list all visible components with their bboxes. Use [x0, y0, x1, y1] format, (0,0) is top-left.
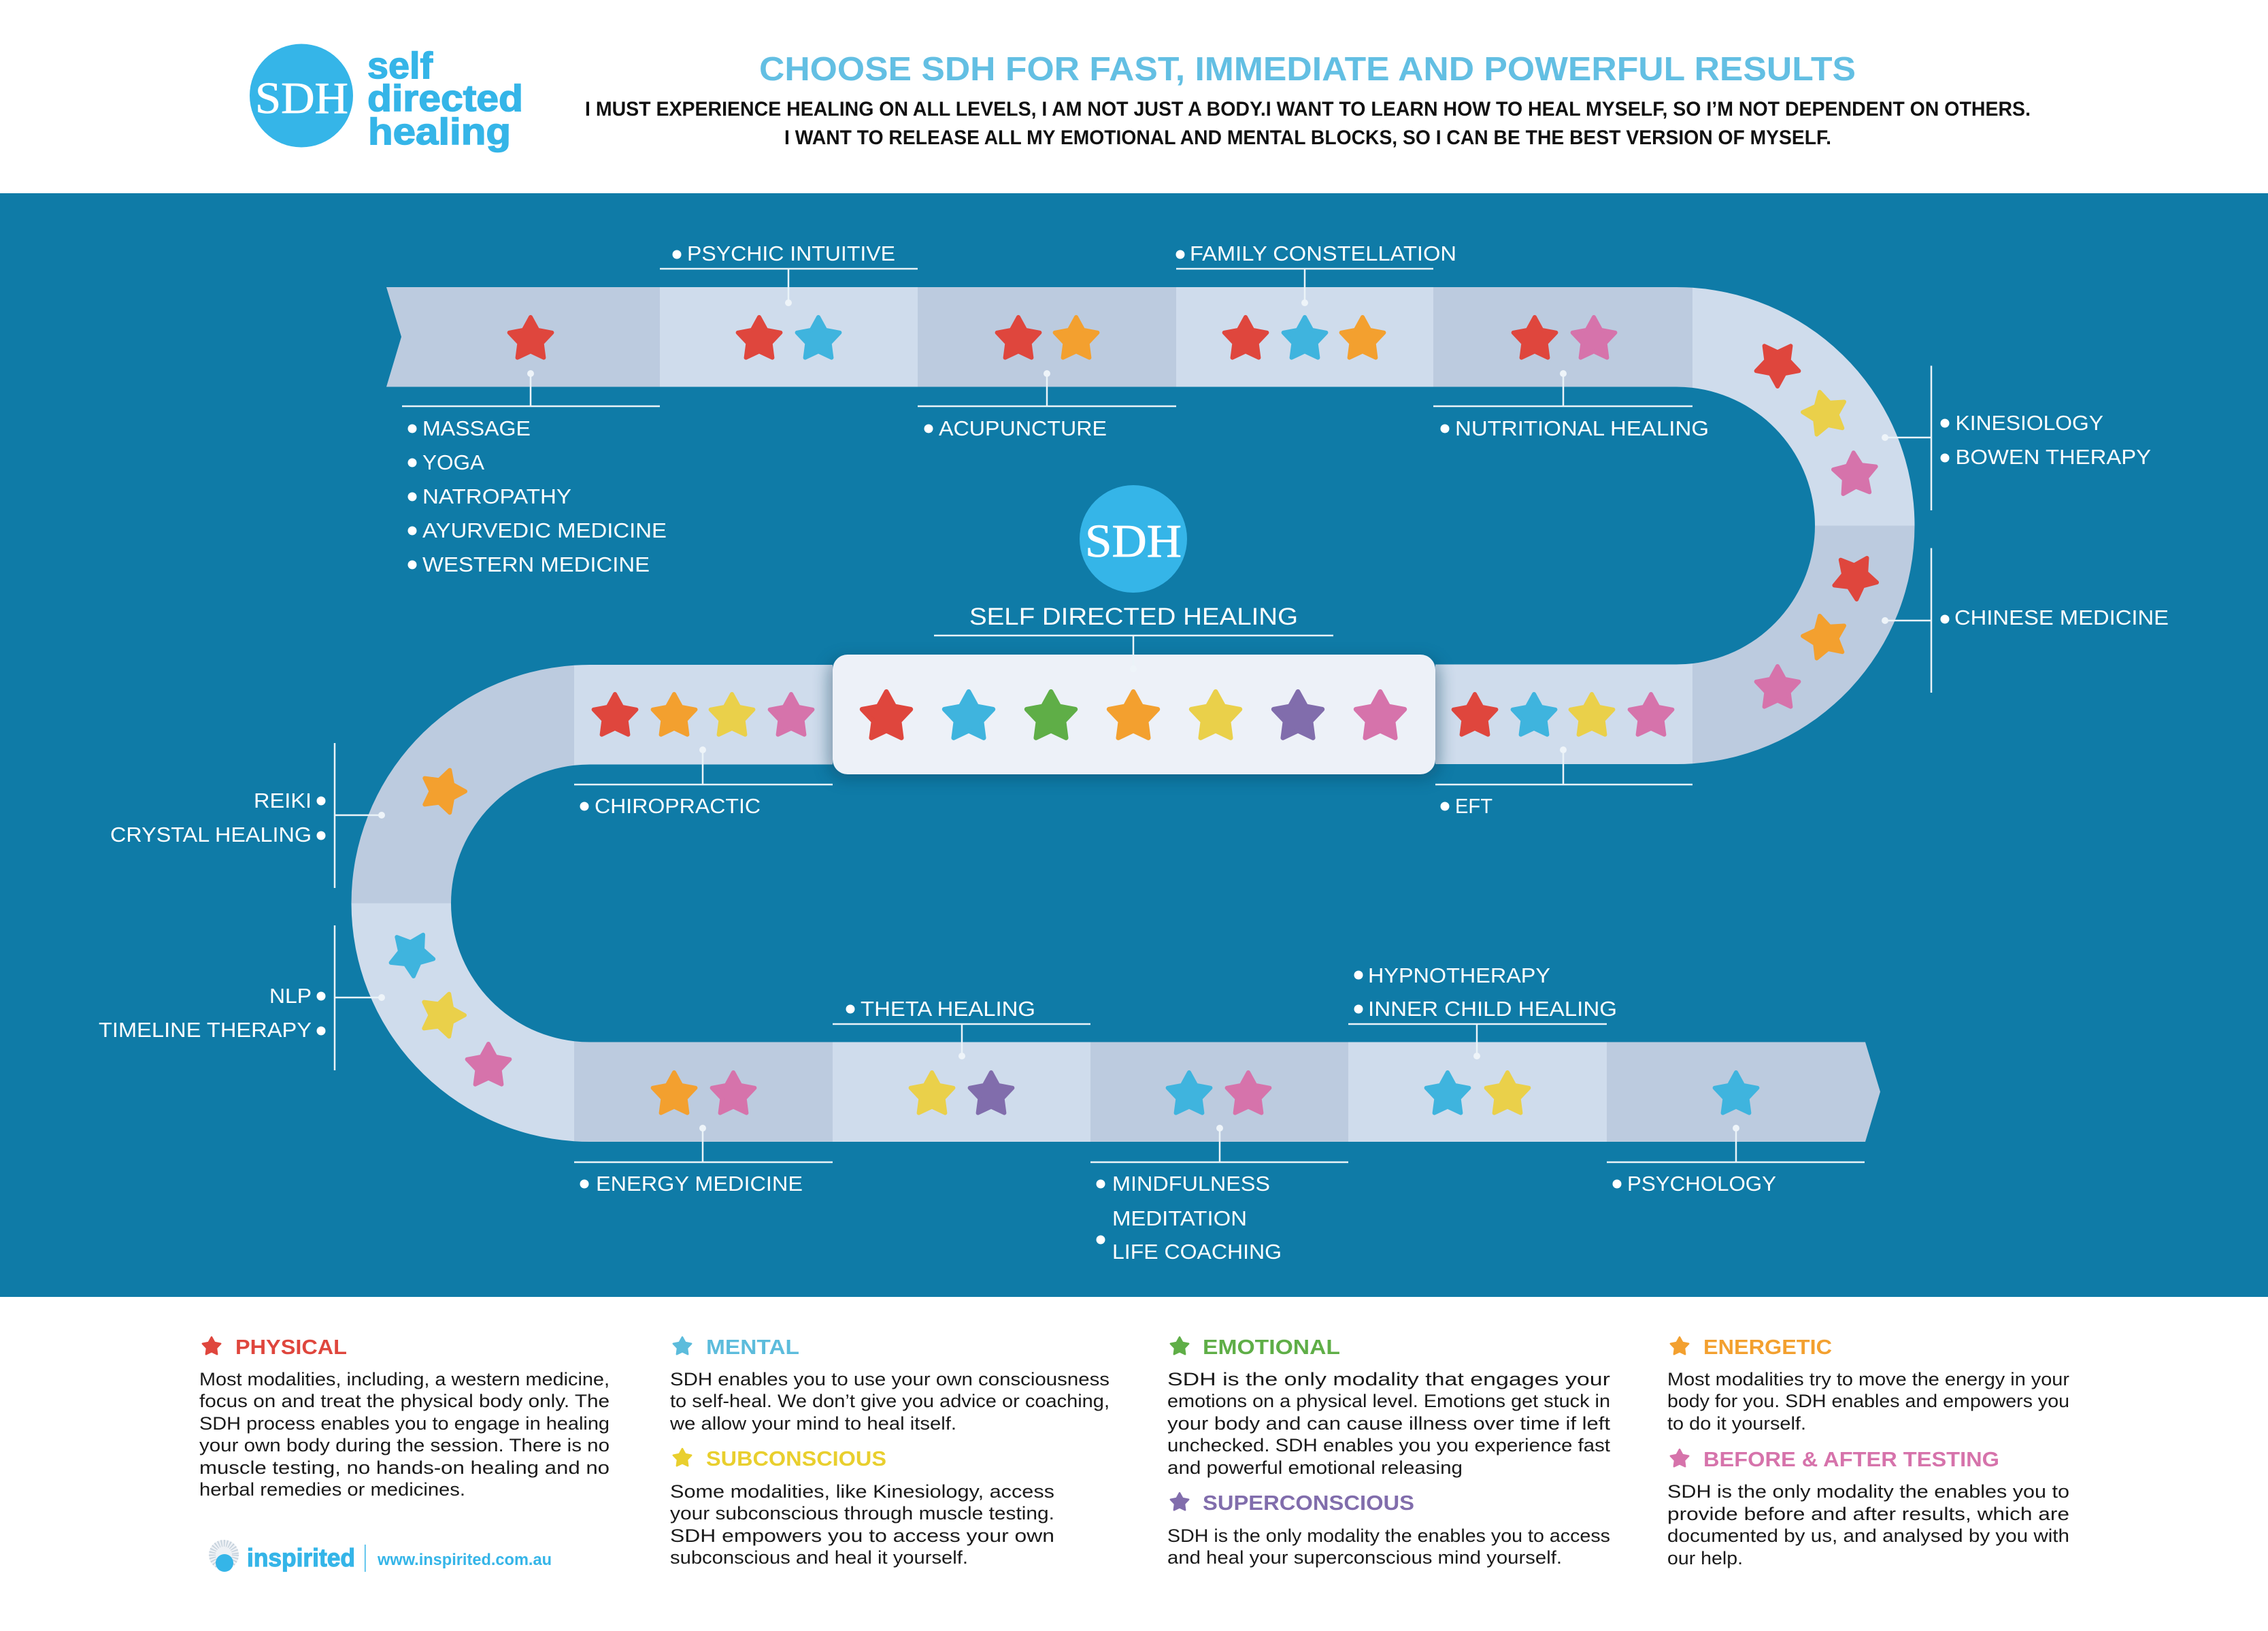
- label: family constellation: FAMILY CONSTELLATION: [1190, 242, 1456, 265]
- label: hypnotherapy and inner child healing: HYPNOTHERAPY: [1368, 963, 1550, 987]
- label: nutritional healing: [1433, 370, 1709, 440]
- label: hypnotherapy and inner child healing: INNER CHILD HEALING: [1368, 997, 1617, 1021]
- legend: emotional: unchecked. SDH enables you you experience fast: [1167, 1435, 1611, 1455]
- label: self directed healing: SELF DIRECTED HEALING: [969, 604, 1298, 630]
- legend: subconscious: SUBCONSCIOUS: [706, 1447, 886, 1470]
- panel: self directed healing card: [833, 655, 1435, 774]
- road: left curve: [351, 665, 574, 1141]
- legend: emotional: your body and can cause illness over time if left: [1167, 1413, 1611, 1434]
- label: acupuncture: [918, 370, 1176, 440]
- label: psychology: [1607, 1125, 1865, 1196]
- legend: subconscious: SDH empowers you to access your own: [670, 1526, 1054, 1546]
- label: reiki and crystal healing: [110, 743, 385, 888]
- center SDH logo: SDH: [1085, 515, 1182, 567]
- label: massage list: MASSAGE: [422, 416, 531, 440]
- legend: before and after testing: our help.: [1667, 1548, 1743, 1568]
- legend: physical: [199, 1335, 610, 1500]
- legend: emotional: [1167, 1335, 1611, 1478]
- road: right curve: [1692, 288, 1915, 763]
- legend: subconscious: subconscious and heal it yourself.: [670, 1547, 968, 1568]
- label: mindfulness meditation and life coaching: [1090, 1125, 1348, 1264]
- legend: physical: SDH process enables you to engage in healing: [199, 1413, 610, 1434]
- header logo: SDH: [255, 73, 348, 123]
- legend: subconscious: Some modalities, like Kinesiology, access: [670, 1481, 1054, 1502]
- stars: middle band left: [594, 694, 812, 735]
- legend: before and after testing: documented by us, and analysed by you with: [1667, 1526, 2069, 1546]
- label: reiki and crystal healing: REIKI: [254, 789, 312, 812]
- inspirited logo: [209, 1540, 552, 1572]
- label: psychic intuitive: [660, 242, 918, 306]
- label: theta healing: THETA HEALING: [861, 997, 1035, 1021]
- label: kinesiology and bowen therapy: [1882, 366, 2151, 510]
- center SDH logo: [1080, 485, 1187, 593]
- header logo: self: [367, 44, 433, 86]
- label: chiropractic: CHIROPRACTIC: [595, 794, 761, 818]
- legend: superconscious: SUPERCONSCIOUS: [1203, 1491, 1414, 1515]
- stars: top band: [510, 317, 1615, 358]
- header logo: directed: [367, 77, 523, 119]
- legend: superconscious: SDH is the only modality the enables you to access: [1167, 1526, 1610, 1546]
- label: self directed healing: [934, 604, 1333, 672]
- legend: mental: to self-heal. We don’t give you advice or coaching,: [670, 1391, 1110, 1411]
- label: eft: [1435, 746, 1692, 818]
- legend: mental: [669, 1335, 1110, 1434]
- legend: mental: MENTAL: [706, 1335, 799, 1359]
- inspirited logo: www.inspirited.com.au: [377, 1551, 552, 1569]
- label: nlp and timeline therapy: TIMELINE THERAPY: [99, 1018, 312, 1042]
- road: top band: [386, 287, 1692, 388]
- legend: physical: herbal remedies or medicines.: [199, 1479, 465, 1500]
- label: energy medicine: [574, 1125, 833, 1196]
- label: chinese medicine: CHINESE MEDICINE: [1954, 606, 2169, 629]
- label: eft: EFT: [1455, 794, 1492, 818]
- legend: physical: PHYSICAL: [235, 1335, 347, 1359]
- legend: physical: focus on and treat the physical body only. The: [199, 1391, 610, 1411]
- label: reiki and crystal healing: CRYSTAL HEALING: [110, 823, 312, 846]
- stars: middle band right: [1454, 694, 1672, 735]
- label: kinesiology and bowen therapy: KINESIOLOGY: [1955, 411, 2103, 435]
- legend: energetic: body for you. SDH enables and empowers you: [1667, 1391, 2069, 1411]
- legend: energetic: Most modalities try to move the energy in your: [1667, 1369, 2069, 1389]
- legend: before and after testing: [1667, 1447, 2069, 1568]
- card shadow: [829, 659, 1439, 778]
- inspirited logo: inspirited: [247, 1544, 355, 1572]
- label: mindfulness meditation and life coaching: MEDITATION: [1112, 1206, 1247, 1230]
- header logo: [250, 44, 523, 152]
- legend: mental: SDH enables you to use your own consciousness: [670, 1369, 1110, 1389]
- header logo: healing: [368, 110, 511, 152]
- label: massage list: YOGA: [422, 450, 484, 474]
- stars: right curve: [1756, 346, 1878, 707]
- legend: energetic: ENERGETIC: [1703, 1335, 1832, 1359]
- legend: physical: Most modalities, including, a western medicine,: [199, 1369, 610, 1389]
- legend: emotional: EMOTIONAL: [1203, 1335, 1340, 1359]
- label: nlp and timeline therapy: [99, 925, 385, 1070]
- subtitle text: [585, 98, 2031, 149]
- label: massage list: [402, 370, 667, 576]
- label: energy medicine: ENERGY MEDICINE: [596, 1172, 803, 1196]
- stars: left curve: [388, 763, 510, 1085]
- label: massage list: NATROPATHY: [422, 484, 571, 508]
- subtitle text: I MUST EXPERIENCE HEALING ON ALL LEVELS, I AM NOT JUST A BODY.I WANT TO LEARN HOW TO HEAL MYSELF, SO I’M NOT DEPENDENT ON OTHERS.: [585, 98, 2031, 120]
- label: chiropractic: [574, 746, 833, 818]
- legend: mental: we allow your mind to heal itself.: [669, 1413, 956, 1434]
- legend: subconscious: [670, 1447, 1054, 1568]
- title: CHOOSE SDH FOR FAST, IMMEDIATE AND POWERFUL RESULTS: [759, 51, 1856, 88]
- legend: before and after testing: provide before and after results, which are: [1667, 1504, 2069, 1524]
- label: psychology: PSYCHOLOGY: [1627, 1172, 1776, 1196]
- legend: emotional: SDH is the only modality that engages your: [1167, 1369, 1610, 1389]
- label: nutritional healing: NUTRITIONAL HEALING: [1455, 416, 1709, 440]
- label: hypnotherapy and inner child healing: [1348, 963, 1617, 1059]
- legend: emotional: and powerful emotional releasing: [1167, 1457, 1463, 1478]
- label: mindfulness meditation and life coaching: LIFE COACHING: [1112, 1240, 1282, 1264]
- label: massage list: AYURVEDIC MEDICINE: [422, 518, 667, 542]
- legend: energetic: [1667, 1335, 2069, 1434]
- road: middle band: [574, 663, 1692, 765]
- legend: before and after testing: BEFORE & AFTER TESTING: [1703, 1447, 1999, 1471]
- legend: emotional: emotions on a physical level. Emotions get stuck in: [1167, 1391, 1610, 1411]
- legend: before and after testing: SDH is the only modality the enables you to: [1667, 1481, 2069, 1502]
- legend: superconscious: and heal your superconscious mind yourself.: [1167, 1547, 1562, 1568]
- road: bottom band with arrow: [574, 1041, 1880, 1142]
- label: theta healing: [833, 997, 1090, 1059]
- label: psychic intuitive: PSYCHIC INTUITIVE: [687, 242, 895, 265]
- legend: physical: muscle testing, no hands-on healing and no: [199, 1457, 610, 1478]
- label: family constellation: [1175, 242, 1456, 306]
- label: nlp and timeline therapy: NLP: [269, 984, 312, 1008]
- panel: healing journey background: [0, 193, 2268, 1297]
- label: mindfulness meditation and life coaching: MINDFULNESS: [1112, 1172, 1270, 1196]
- legend: physical: your own body during the session. There is no: [199, 1435, 610, 1455]
- subtitle text: I WANT TO RELEASE ALL MY EMOTIONAL AND MENTAL BLOCKS, SO I CAN BE THE BEST VERSION OF MYSELF.: [784, 127, 1831, 149]
- legend: subconscious: your subconscious through muscle testing.: [670, 1503, 1054, 1523]
- legend: energetic: to do it yourself.: [1667, 1413, 1806, 1434]
- label: chinese medicine: [1882, 548, 2169, 693]
- label: acupuncture: ACUPUNCTURE: [939, 416, 1107, 440]
- label: kinesiology and bowen therapy: BOWEN THERAPY: [1955, 445, 2151, 469]
- stars: bottom band: [653, 1072, 1757, 1113]
- label: massage list: WESTERN MEDICINE: [422, 553, 650, 576]
- legend: superconscious: [1167, 1491, 1610, 1568]
